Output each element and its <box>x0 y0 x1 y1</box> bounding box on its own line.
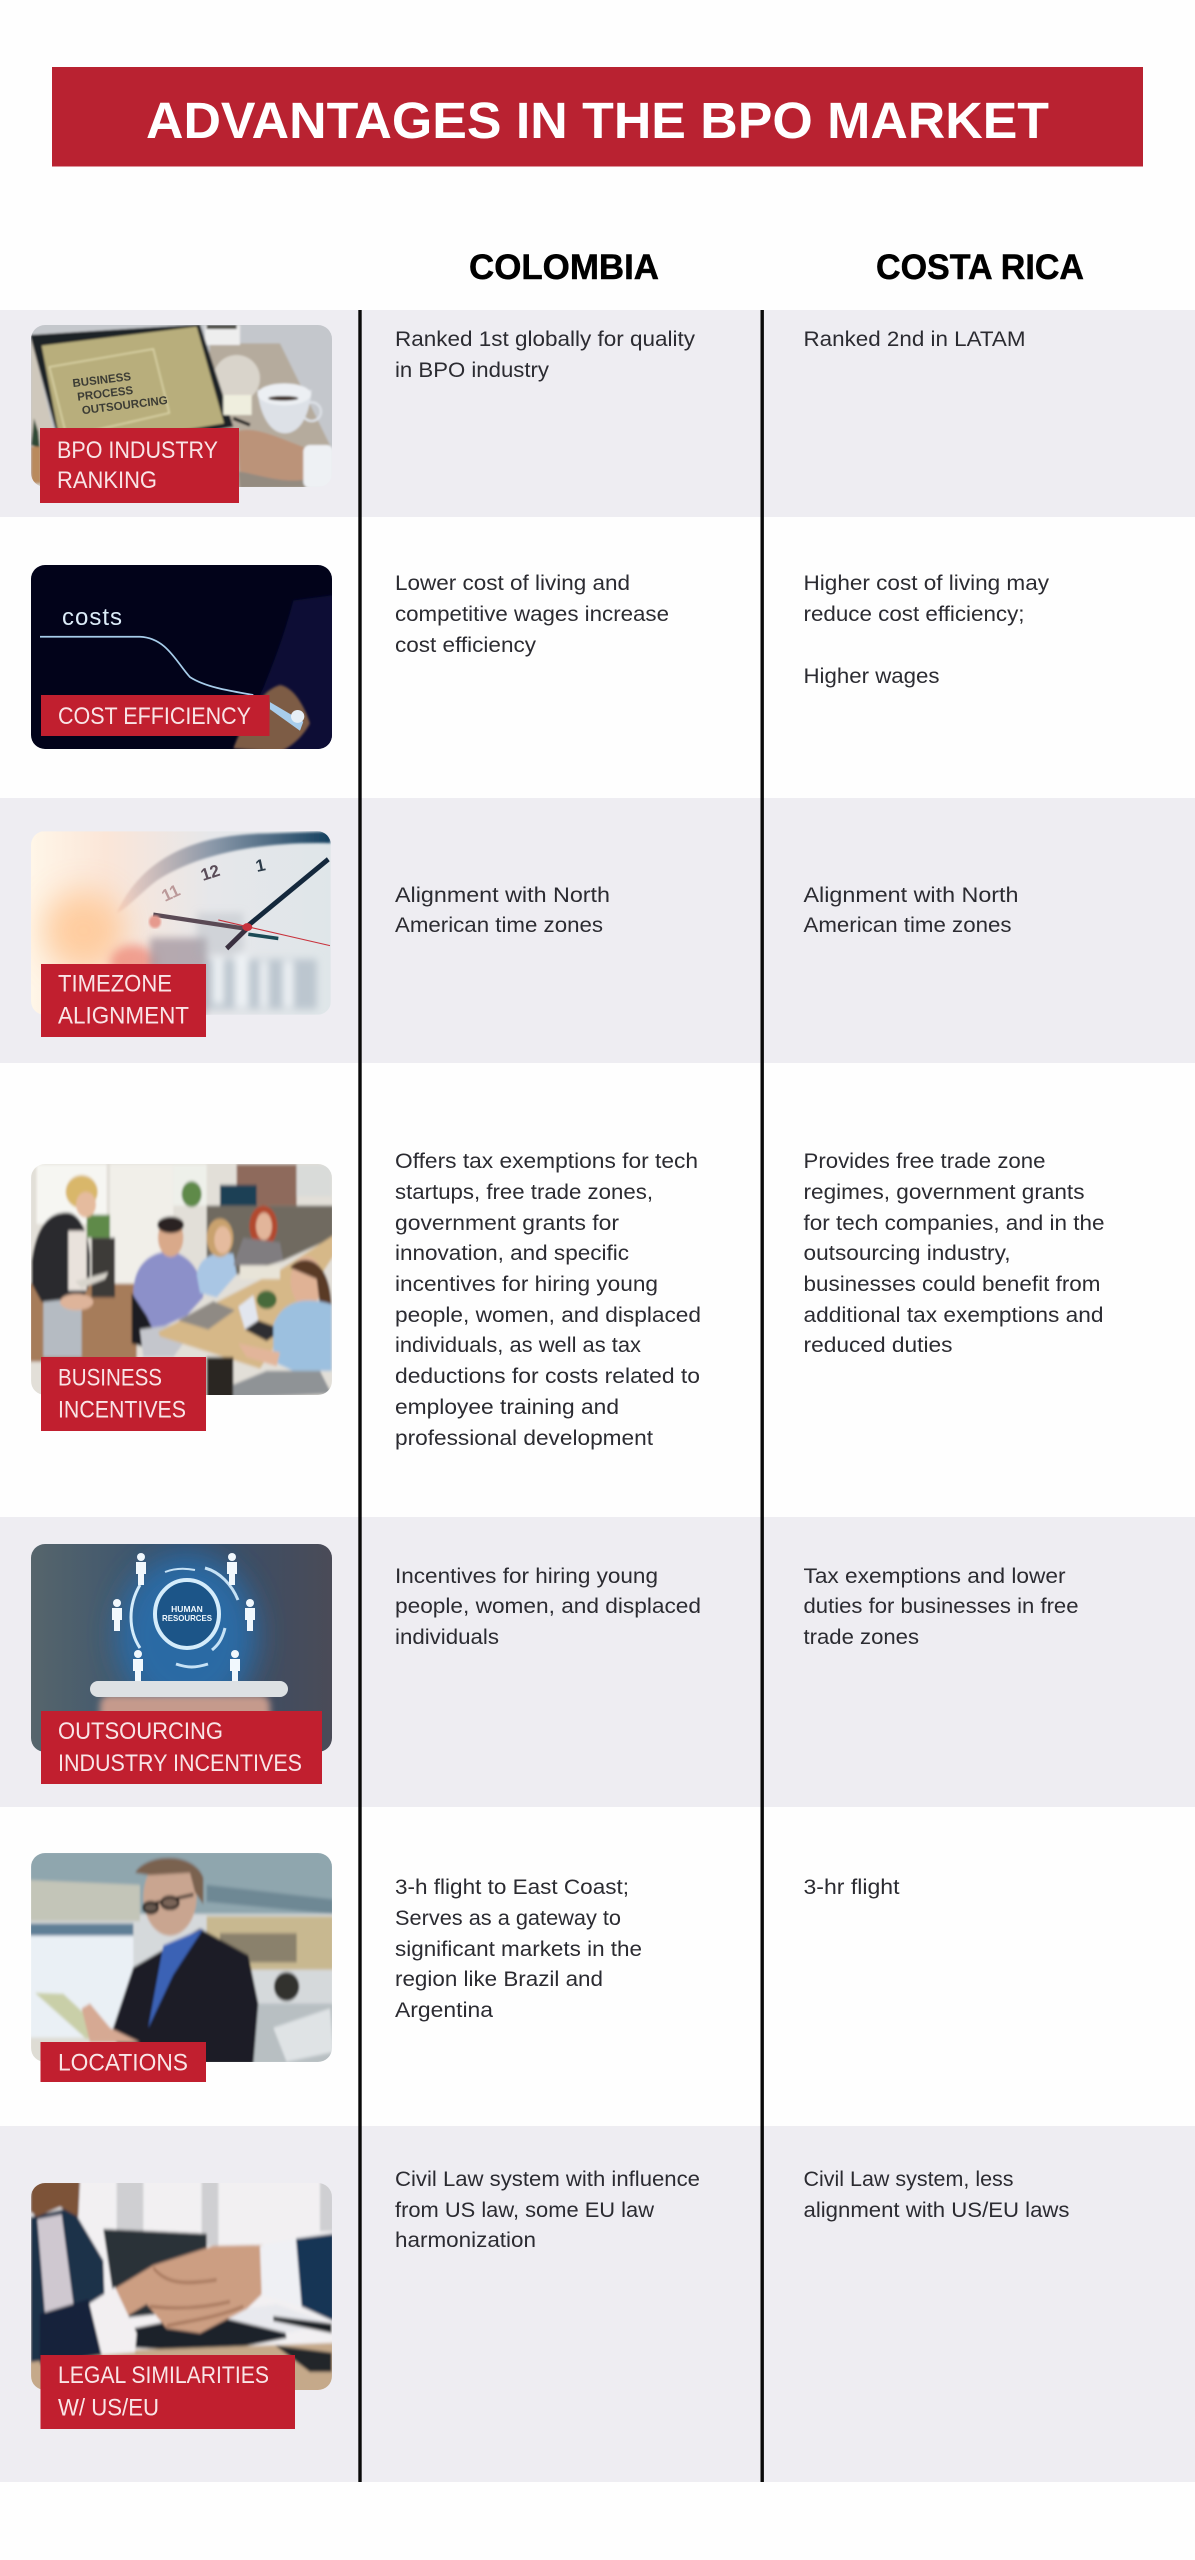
text: Costa Rica cost: Higher wages <box>804 664 940 688</box>
text: Colombia legal: Civil Law system with influence <box>395 2167 700 2191</box>
text: Costa Rica cost: Higher cost of living may <box>804 571 1049 595</box>
label: legal similarities: W/ US/EU <box>58 2394 159 2422</box>
text: Costa Rica cost <box>804 571 1049 688</box>
text: Colombia incentives <box>395 1149 701 1450</box>
panel: cost efficiency <box>31 565 1049 749</box>
text: Costa Rica outsourcing: Tax exemptions and lower <box>804 1564 1066 1588</box>
label: cost efficiency: COST EFFICIENCY <box>58 703 251 730</box>
photo: falling costs line <box>30 563 333 752</box>
text: Colombia ranking: Ranked 1st globally for quality <box>395 327 695 351</box>
label: BPO industry ranking <box>40 428 239 503</box>
text: Costa Rica legal: Civil Law system, less <box>804 2167 1014 2191</box>
text: Costa Rica incentives: Provides free trade zone <box>804 1149 1046 1173</box>
label: outsourcing industry incentives <box>41 1711 322 1784</box>
text: Colombia incentives: startups, free trade zones, <box>395 1180 653 1204</box>
photo: tablet with business process outsourcing <box>31 325 332 487</box>
text: Colombia incentives: government grants for <box>395 1211 619 1235</box>
text: Colombia incentives: people, women, and displaced <box>395 1303 701 1327</box>
text: Colombia timezone <box>395 883 610 937</box>
panel: legal similarities <box>0 2126 1195 2482</box>
text: Colombia outsourcing: Incentives for hiring young <box>395 1564 658 1588</box>
text: Colombia incentives: employee training and <box>395 1395 619 1419</box>
label: cost efficiency <box>41 695 270 736</box>
label: business incentives: INCENTIVES <box>58 1396 186 1424</box>
panel: BPO industry ranking <box>0 310 1195 517</box>
photo: human resources hologram: HUMAN <box>171 1604 203 1614</box>
column heading: Colombia: COLOMBIA <box>469 248 659 287</box>
text: Colombia ranking: in BPO industry <box>395 358 549 382</box>
text: Colombia outsourcing: people, women, and displaced <box>395 1594 701 1618</box>
text: Costa Rica timezone: American time zones <box>804 913 1012 937</box>
label: business incentives: BUSINESS <box>58 1364 162 1392</box>
photo: human resources hologram <box>31 1544 332 1752</box>
label: legal similarities <box>40 2355 295 2429</box>
label: business incentives <box>41 1357 206 1431</box>
photo: clock and crowd: 1 <box>254 855 267 876</box>
photo: tablet with business process outsourcing: BUSINESS <box>72 371 132 390</box>
text: Colombia ranking <box>395 327 695 382</box>
text: Colombia locations: region like Brazil and <box>395 1967 603 1991</box>
text: Colombia timezone: Alignment with North <box>395 883 610 907</box>
text: Colombia timezone: American time zones <box>395 913 603 937</box>
text: Colombia cost <box>395 571 669 657</box>
photo: human resources hologram: RESOURCES <box>162 1613 212 1623</box>
title banner <box>52 67 1143 166</box>
text: Costa Rica incentives: additional tax exemptions and <box>804 1303 1104 1327</box>
text: Colombia locations: 3-h flight to East Coast; <box>395 1875 629 1899</box>
photo: clock and crowd: 12 <box>198 861 222 885</box>
text: Colombia legal: harmonization <box>395 2228 536 2252</box>
photo: clock and crowd: 11 <box>159 881 183 906</box>
photo: businessman at airport <box>30 1851 333 2064</box>
title banner: ADVANTAGES IN THE BPO MARKET <box>146 92 1049 149</box>
text: Colombia locations: significant markets in the <box>395 1937 642 1961</box>
text: Costa Rica locations: 3-hr flight <box>804 1875 900 1899</box>
text: Costa Rica incentives: for tech companies, and in the <box>804 1211 1104 1235</box>
text: Colombia incentives: innovation, and specific <box>395 1241 629 1265</box>
text: Costa Rica incentives: regimes, government grants <box>804 1180 1084 1204</box>
text: Costa Rica cost: reduce cost efficiency; <box>804 602 1024 626</box>
text: Colombia legal <box>395 2167 700 2252</box>
text: Costa Rica legal: alignment with US/EU laws <box>804 2198 1070 2222</box>
photo: tablet with business process outsourcing: OUTSOURCING <box>81 395 168 417</box>
text: Colombia legal: from US law, some EU law <box>395 2198 654 2222</box>
photo: handshake <box>30 2180 333 2394</box>
label: outsourcing industry incentives: INDUSTRY INCENTIVES <box>58 1750 302 1777</box>
label: legal similarities: LEGAL SIMILARITIES <box>58 2362 269 2389</box>
label: locations: LOCATIONS <box>58 2050 188 2076</box>
text: Costa Rica ranking: Ranked 2nd in LATAM <box>804 327 1026 351</box>
text: Colombia outsourcing <box>395 1564 701 1649</box>
text: Costa Rica incentives <box>804 1149 1104 1357</box>
text: Colombia locations <box>395 1875 642 2022</box>
label: BPO industry ranking: RANKING <box>57 467 157 494</box>
text: Costa Rica outsourcing: duties for businesses in free <box>804 1594 1078 1618</box>
text: Costa Rica outsourcing <box>804 1564 1078 1649</box>
photo: tablet with business process outsourcing: PROCESS <box>77 385 134 404</box>
text: Costa Rica timezone <box>804 883 1018 937</box>
text: Costa Rica outsourcing: trade zones <box>804 1625 919 1649</box>
column heading: Costa Rica: COSTA RICA <box>876 248 1084 287</box>
photo: clock and crowd <box>31 831 331 1015</box>
text: Colombia incentives: incentives for hiring young <box>395 1272 658 1296</box>
label: timezone alignment: ALIGNMENT <box>58 1002 189 1030</box>
text: Colombia incentives: individuals, as well as tax <box>395 1333 641 1357</box>
text: Colombia outsourcing: individuals <box>395 1625 499 1649</box>
text: Costa Rica legal <box>804 2167 1070 2222</box>
panel: timezone alignment <box>0 798 1195 1063</box>
photo: team in office <box>30 1160 333 1398</box>
text: Colombia cost: cost efficiency <box>395 633 536 657</box>
text: Costa Rica incentives: businesses could benefit from <box>804 1272 1100 1296</box>
label: outsourcing industry incentives: OUTSOURCING <box>58 1718 223 1745</box>
text: Colombia locations: Serves as a gateway to <box>395 1906 621 1930</box>
text: Costa Rica incentives: outsourcing industry, <box>804 1241 1010 1265</box>
panel: locations <box>31 1853 900 2082</box>
text: Colombia incentives: professional development <box>395 1426 653 1450</box>
text: Colombia cost: competitive wages increase <box>395 602 669 626</box>
text: Colombia incentives: Offers tax exemptions for tech <box>395 1149 698 1173</box>
panel: business incentives <box>31 1152 1104 1450</box>
text: Colombia cost: Lower cost of living and <box>395 571 630 595</box>
label: timezone alignment: TIMEZONE <box>58 970 172 998</box>
label: locations <box>40 2042 206 2082</box>
label: timezone alignment <box>41 964 206 1037</box>
text: Colombia incentives: deductions for costs related to <box>395 1364 700 1388</box>
label: BPO industry ranking: BPO INDUSTRY <box>57 437 218 464</box>
text: Colombia locations: Argentina <box>395 1998 493 2022</box>
panel: outsourcing industry incentives <box>0 1517 1195 1807</box>
text: Costa Rica incentives: reduced duties <box>804 1333 952 1357</box>
text: Costa Rica timezone: Alignment with North <box>804 883 1018 907</box>
photo: falling costs line: costs <box>62 604 123 631</box>
